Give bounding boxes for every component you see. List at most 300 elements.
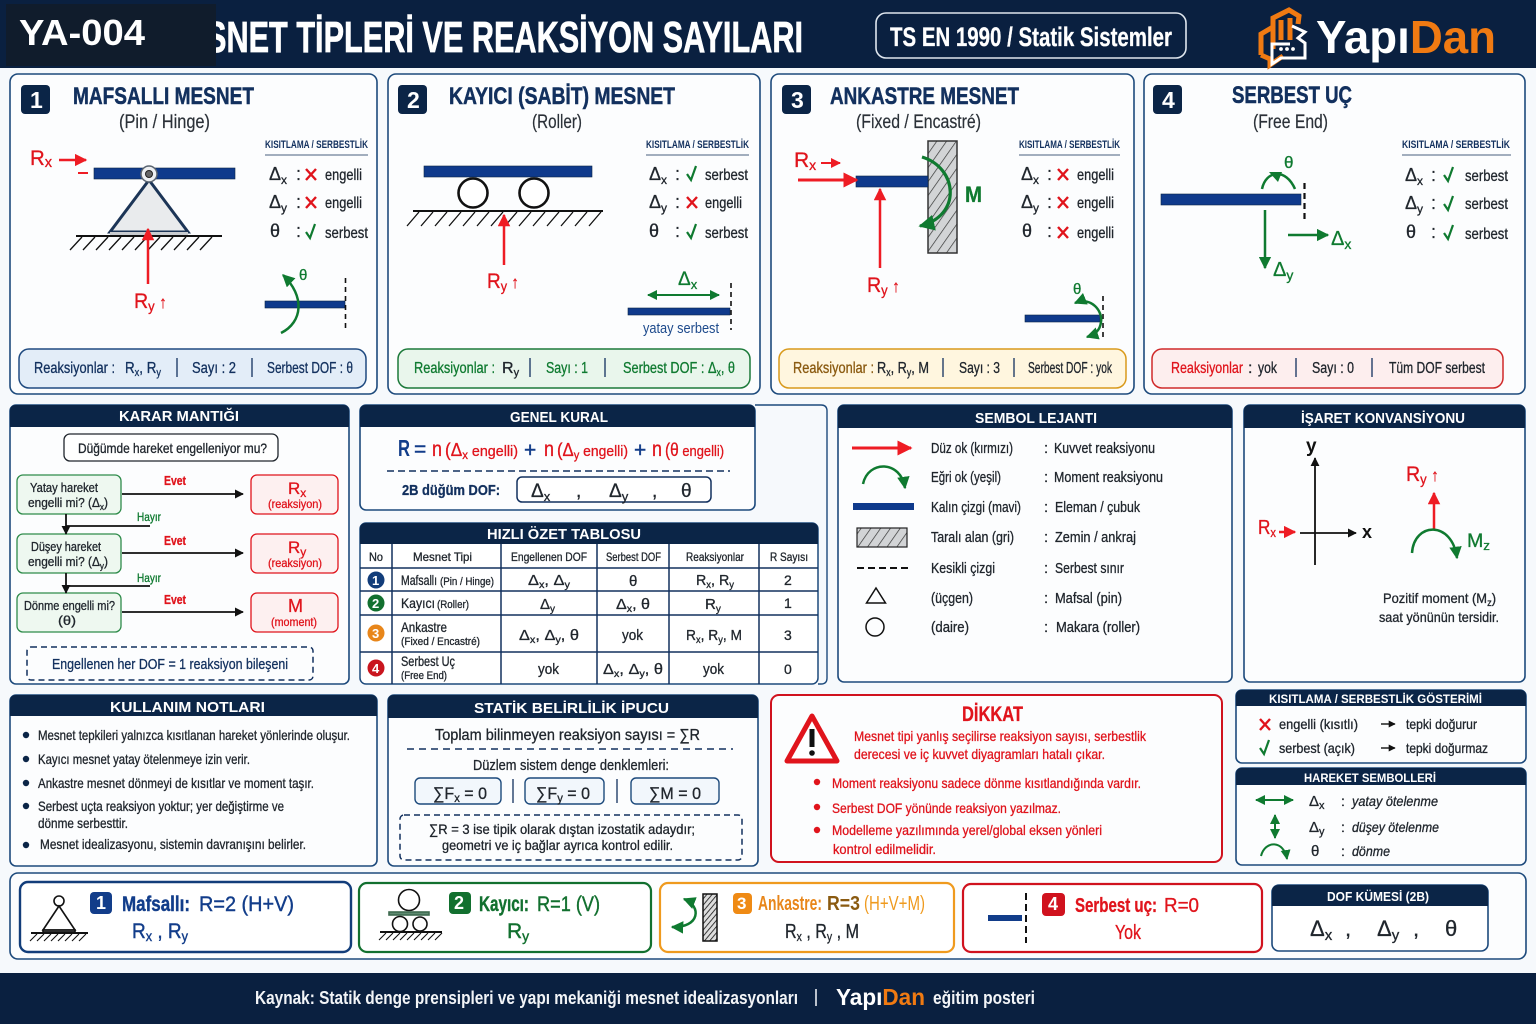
formula: + [524,439,536,462]
constraints list: engelli [1077,167,1114,184]
constraints list: Δ [1405,193,1417,213]
bullet list: Mesnet idealizasyonu, sistemin davranışını belirler. [40,836,306,852]
summary bar: , R [139,360,156,377]
flow arrows [66,473,243,612]
question box: Düğümde hareket engelleniyor mu? [78,440,267,456]
row 2: (Roller) [437,599,469,611]
constraints list: : [296,164,301,184]
constraints list [1402,138,1511,243]
summary bar: x [886,367,891,379]
heading [830,83,1019,133]
row 3: 3 [372,626,379,641]
horizontal free mini diagram: yatay serbest [643,320,720,337]
motion labels: Δ [1309,793,1319,810]
decision 1: x [100,502,104,512]
header [1236,690,1526,706]
dof set: Δ [1310,916,1325,941]
badge [449,892,471,914]
text: R [132,920,147,943]
row 4 [368,653,792,682]
reaction Ry and moment: z [1483,538,1490,553]
header [360,405,755,427]
constraints list: serbest [1465,226,1508,243]
icon: pin [30,896,88,941]
text: R=3 [827,893,860,915]
formula: n [432,438,442,461]
legend names [931,440,1021,636]
motion labels: x [1319,800,1325,812]
row 4: yok [703,661,724,678]
constraints list: : [675,192,680,212]
row 3: x [696,635,701,646]
constraints list: : [1047,221,1052,241]
header: KISITLAMA / SERBESTLİK GÖSTERİMİ [1269,691,1482,706]
constraints list: Δ [1021,164,1033,184]
reaction Ry and moment: R [1406,463,1421,486]
panel: kullanım notları [10,695,377,866]
result Ry: (reaksiyon) [268,556,322,570]
summary bar: R [877,360,889,377]
constraints list: KISITLAMA / SERBESTLİK [1019,138,1120,151]
row 4: 0 [784,661,792,677]
pin support diagram: y [148,298,155,314]
legend meanings: : [1044,560,1048,577]
decision 1: Yatay hareket [30,480,98,495]
pin support diagram: x [45,154,52,171]
header: KARAR MANTIĞI [119,407,239,425]
row 1: (Pin / Hinge) [440,576,494,588]
row 4: yok [538,661,559,678]
badge 1: 1 [30,87,43,113]
formula: n [544,438,554,461]
rule callout: Engellenen her DOF = 1 reaksiyon bileşeni [52,656,288,673]
header [1236,768,1526,785]
legend meanings: Serbest sınır [1055,560,1124,577]
row 3: yok [622,627,643,644]
equilibrium equations: ∑M = 0 [649,784,701,803]
free end diagram: Δ [1273,259,1286,281]
decision 2: y [100,561,104,571]
legend names: Düz ok (kırmızı) [931,440,1013,457]
row: engelli [1260,716,1477,732]
text: , R [152,920,182,943]
constraints list: engelli [705,195,742,212]
summary bar: , R [891,360,907,377]
panel: hareket sembolleri [1236,768,1526,865]
reaction Ry and moment: M [1467,531,1483,552]
result M [251,593,338,632]
fixed support diagram: x [809,157,816,173]
result Rx: R [288,479,300,498]
bullet list: Ankastre mesnet dönmeyi de kısıtlar ve moment taşır. [38,775,314,791]
constraints list: engelli [325,195,362,212]
summary bar: Reaksiyonlar [1171,360,1244,377]
2B DOF row: x [544,489,551,504]
formula: (θ engelli) [665,440,724,460]
summary bar: Sayı : 1 [546,360,588,377]
row 1: 2 [784,572,792,588]
constraints list: θ [1406,222,1416,242]
constraints list: KISITLAMA / SERBESTLİK [646,138,749,151]
row 1: x [539,580,544,591]
fixed support diagram [794,141,982,298]
legend meanings: Moment reaksiyonu [1054,469,1163,486]
constraints list: serbest [1465,168,1508,185]
formula: (Δ [557,440,575,460]
dof set: y [1392,927,1400,944]
legend meanings: Eleman / çubuk [1055,499,1140,516]
legend meanings: : [1044,590,1048,607]
pin support diagram: R [30,147,45,170]
fixed support diagram: R [794,149,809,172]
decision 3 [17,593,121,632]
header: DOF KÜMESİ (2B) [1327,889,1429,904]
horizontal free mini diagram: Δ [678,269,691,290]
motion labels [1309,793,1439,860]
constraints list: Δ [269,164,281,184]
dof set: , [1345,916,1351,941]
header: STATİK BELİRLİLİK İPUCU [474,700,669,717]
note: saat yönünün tersidir. [1379,609,1499,625]
motion labels: : [1341,843,1345,859]
constraints list: θ [649,221,659,241]
fixed support diagram: M [965,182,982,207]
constraints list: Δ [1021,192,1033,212]
row: serbest: serbest (açık) [1279,740,1355,756]
card 3: ankastre [660,883,954,952]
header: İŞARET KONVANSİYONU [1301,410,1465,427]
equilibrium equations: = 0 [460,784,487,803]
decision 3: Dönme engelli mi? [24,598,115,613]
decision 1 [17,475,121,514]
axes: x [1362,522,1372,542]
panel 3: ankastre mesnet [771,74,1134,394]
constraints list: Δ [1405,165,1417,185]
2B DOF row: Δ [531,481,544,502]
legend names: Eğri ok (yeşil) [931,469,1001,486]
row 3: x [530,635,535,646]
summary bar: Sayı : 2 [192,360,236,377]
standard badge: TS EN 1990 / Statik Sistemler [890,22,1172,52]
icon: fixed [672,894,717,941]
legend icons [852,448,914,636]
heading: (Roller) [532,112,582,133]
reaction Rx: x [1270,525,1276,540]
row 2: 2 [372,596,379,611]
motion labels: : [1341,793,1345,809]
summary bar: Reaksiyonlar : [793,360,874,377]
rotation free mini diagram: θ [299,267,307,284]
row 4: (Free End) [401,670,447,682]
roller support diagram [407,166,603,294]
free end diagram [1161,153,1351,283]
2B DOF row: θ [681,481,692,502]
formula: R [398,435,410,461]
formula: x [462,448,468,462]
badge 4: 4 [1162,87,1175,113]
summary bar [779,349,1126,388]
constraints list: y [1417,202,1423,216]
row 3 [368,619,792,648]
legend meanings: Makara (roller) [1056,619,1140,636]
row 1: 1 [372,573,379,588]
constraints list: y [1033,201,1039,215]
summary bar: y [156,367,161,379]
dof set: θ [1445,916,1457,941]
rule callout [27,647,313,680]
constraints list: : [675,164,680,184]
summary bar: , M [911,360,929,377]
constraints list: : [675,221,680,241]
free end diagram: x [1344,236,1351,252]
badge [733,893,752,914]
constraints list: : [1431,165,1436,185]
equilibrium equations: = 0 [563,784,590,803]
decision 3: (θ) [58,613,76,628]
legend meanings: : [1044,440,1048,457]
code tag: YA-004 [6,4,216,66]
summary bar: , θ [721,360,735,377]
2B DOF row: , [576,481,581,502]
dof set: Δ [1377,916,1392,941]
row 1: , R [711,572,729,589]
constraints list: : [1431,222,1436,242]
constraints list: θ [1022,221,1032,241]
badge: 4 [1048,894,1058,914]
decision 2 [17,534,121,573]
summary bar: Sayı : 0 [1312,360,1354,377]
card: dof kümesi [1272,885,1488,951]
standard badge [876,13,1186,58]
panel: statik belirlilik ipucu [388,695,758,866]
formula: engelli) [579,443,628,460]
constraints list: : [1047,164,1052,184]
2B DOF row: y [622,489,629,504]
roller support diagram: R [487,270,502,293]
formula [398,435,724,462]
axes [1300,436,1372,565]
badge 3: 3 [791,87,804,113]
constraints list [1019,138,1120,242]
pin support diagram [30,147,235,314]
legend meanings: : [1044,499,1048,516]
motion labels: θ [1311,843,1319,860]
summary bar: yok [1258,360,1278,377]
text: R [785,921,799,943]
row 2: Δ [616,596,626,613]
summary bar: Reaksiyonlar : [414,360,495,377]
note [1379,590,1499,625]
bullet list [23,727,350,852]
summary bar: R [125,360,137,377]
row: engelli: tepki doğurur [1406,716,1477,732]
header [388,695,758,718]
row 3: y [718,635,723,646]
fixed mini diagram [1025,281,1103,340]
dof set: x [1325,927,1333,944]
equilibrium equations: y [557,791,563,805]
flow arrows: Evet [164,473,187,488]
row 2: x [627,604,632,615]
bullet list: Kayıcı mesnet yatay ötelenmeye izin verir. [38,751,250,767]
result M: (moment) [271,615,317,629]
pin support diagram: R [134,290,149,313]
warning text: Mesnet tipi yanlış seçilirse reaksiyon sayısı, serbestlik [854,728,1147,744]
table: hızlı özet [360,523,818,684]
column titles: R Sayısı [770,550,808,564]
row 1 [368,572,792,591]
decision 1: ) [104,495,108,510]
row 3: , θ [561,627,579,644]
row 4: , Δ [619,661,639,678]
table header [360,523,818,544]
equilibrium equations: x [454,791,460,805]
text: Ankastre: [758,893,822,915]
warning bullets: kontrol edilmelidir. [833,841,936,857]
formula: y [574,448,579,462]
warning text [854,728,1147,762]
result Ry: R [288,538,300,557]
reaction Ry and moment [1406,463,1490,558]
constraints list: Δ [269,192,281,212]
fixed mini diagram: θ [1073,281,1081,298]
summary bar: y [514,367,520,379]
flow arrows: Hayır [137,510,161,524]
column titles: Reaksiyonlar [686,550,744,564]
text: Serbest uç: [1075,895,1157,917]
text: Mafsallı: [122,893,190,916]
heading: (Fixed / Encastré) [856,112,981,133]
constraints list: engelli [325,167,362,184]
footer brand: eğitim posteri [933,988,1035,1008]
legend names: Kesikli çizgi [931,560,995,577]
constraints list: engelli [1077,195,1114,212]
header [1244,405,1525,428]
decision 1: engelli mi? (Δ [28,495,107,510]
motion icons [1256,800,1293,859]
row 4: Serbest Uç [401,653,455,669]
isostatic note [400,815,742,860]
2B DOF row: 2B düğüm DOF: [402,482,500,499]
panel: sembol lejantı [838,405,1232,682]
reaction Rx: R [1258,517,1272,539]
code tag: YA-004: YA-004 [19,12,145,53]
badge 1 [21,85,50,114]
isostatic note: geometri ve iç bağlar ayrıca kontrol edilir. [442,837,673,853]
legend names: Taralı alan (gri) [931,529,1014,546]
axes: y [1306,436,1317,457]
note: z [1487,598,1492,609]
title: MESNET TİPLERİ VE REAKSİYON SAYILARI [160,13,803,62]
note: ) [1492,590,1496,606]
equilibrium equations [415,778,719,805]
header [10,405,349,427]
badge [1042,893,1065,916]
rotation free mini diagram [265,267,346,333]
free end diagram: Δ [1331,228,1344,250]
free end diagram: y [1286,267,1293,283]
text: R [507,920,522,943]
row 1: , Δ [544,572,565,589]
constraints list: serbest [1465,196,1508,213]
formula: + [634,439,646,462]
panel 1: mafsallı mesnet [10,74,377,394]
bullet list: dönme serbesttir. [38,815,128,831]
warning bullets [814,775,1141,857]
text: y [827,929,833,944]
row 4: x [614,669,619,680]
flow arrows: Evet [164,533,187,548]
pin support diagram: ↑ [155,293,167,312]
icon: roller [379,890,442,940]
text: R=1 (V) [537,893,600,916]
bullet list: Mesnet tepkileri yalnızca kısıtlanan hareket yönlerinde oluşur. [38,727,350,743]
heading: KAYICI (SABİT) MESNET [449,83,675,110]
column titles: Mesnet Tipi [413,550,472,564]
legend meanings [1044,440,1163,636]
constraints list: serbest [705,225,748,242]
warning text: derecesi ve iç kuvvet diyagramları hatalı çıkar. [854,746,1105,762]
row 3: Ankastre [401,619,447,635]
summary bar: Serbest DOF : Δ [623,360,740,377]
summary bar: Reaksiyonlar : [34,360,115,377]
badge 3 [782,85,811,114]
warning bullets: Modelleme yazılımında yerel/global eksen yönleri [832,822,1102,838]
equilibrium equations: ∑F [433,784,456,803]
result Rx [251,475,338,514]
header: HAREKET SEMBOLLERİ [1304,770,1436,785]
reaction Ry and moment: ↑ [1427,466,1439,485]
legend names: (daire) [931,619,969,636]
summary bar: y [907,367,912,379]
equations title: Düzlem sistem denge denklemleri: [473,757,669,774]
row 1: θ [629,573,637,590]
constraints list: KISITLAMA / SERBESTLİK [265,138,368,151]
summary bar: Serbest DOF : θ [267,360,353,377]
panel: dikkat [771,695,1222,862]
row 3: y [555,635,561,646]
footer brand: YapıDan [836,984,925,1010]
row 3: , Δ [535,627,555,644]
row 4: Δ [603,661,613,678]
panel: genel kural [360,405,755,510]
badge [90,892,112,914]
constraints list: x [281,173,287,187]
row 2: y [716,604,721,615]
motion labels: düşey ötelenme [1352,819,1439,835]
constraints list: : [1431,193,1436,213]
result Ry [251,534,338,573]
row 1: y [565,580,570,591]
header [10,695,377,716]
bullet list: Serbest uçta reaksiyon yoktur; yer değiştirme ve [38,798,284,814]
text [122,893,294,944]
row: serbest [1260,740,1488,756]
2B DOF row [402,477,711,504]
fixed support diagram: ↑ [888,277,900,296]
constraints list: x [1033,173,1039,187]
text [1075,895,1199,944]
card 4: serbest uç [963,884,1262,952]
row 4: y [639,669,645,680]
row 3: Δ [519,627,529,644]
heading: (Pin / Hinge) [119,112,210,133]
constraints list: engelli [1077,225,1114,242]
row 1: R [696,572,707,589]
constraints list: serbest [325,225,368,242]
row: serbest: tepki doğurmaz [1406,740,1488,756]
panel 2: kayıcı mesnet [388,74,760,394]
